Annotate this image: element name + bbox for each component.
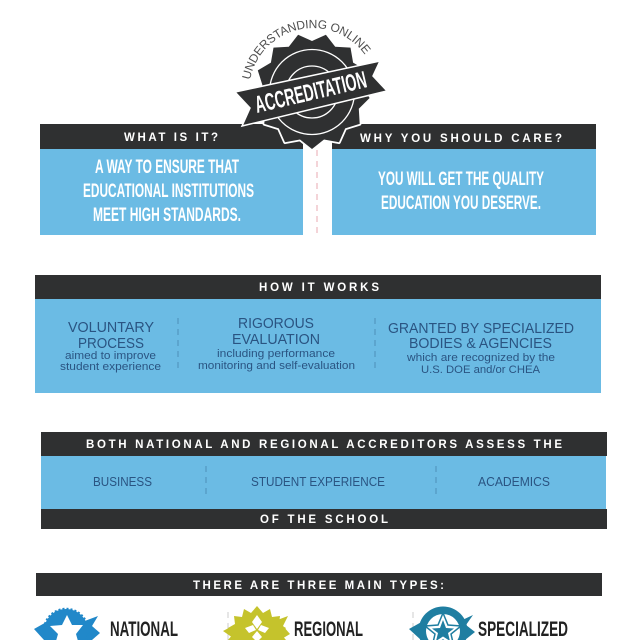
column: rigorous evaluation: EVALUATION xyxy=(232,332,320,348)
column: voluntary process: aimed to improve xyxy=(65,350,156,362)
text block: definition: EDUCATIONAL INSTITUTIONS xyxy=(83,180,254,202)
panel: what is it xyxy=(40,124,303,235)
panel: accreditors assess xyxy=(41,432,607,529)
ribbon text: ACCREDITATION xyxy=(252,67,369,119)
icon: gear seal xyxy=(254,35,370,149)
heading bar: three main types: THERE ARE THREE MAIN TYPES: xyxy=(193,580,444,592)
badge: understanding online accreditation xyxy=(236,20,386,149)
text block: definition: A WAY TO ENSURE THAT xyxy=(95,156,239,178)
column: voluntary process: VOLUNTARY xyxy=(68,320,154,336)
text block: reason xyxy=(378,168,544,214)
type: regional xyxy=(223,606,363,640)
type: national xyxy=(34,609,178,640)
heading: what is it: WHAT IS IT? xyxy=(124,132,218,144)
label: academics: ACADEMICS xyxy=(478,475,550,489)
heading bar: three main types xyxy=(36,573,602,596)
heading: why you should care: WHY YOU SHOULD CARE? xyxy=(360,133,562,145)
label: business: BUSINESS xyxy=(93,475,152,489)
column: voluntary process: PROCESS xyxy=(78,336,144,352)
icon: national badge xyxy=(34,609,100,640)
panel: how it works xyxy=(35,275,601,393)
column: rigorous evaluation xyxy=(198,316,355,372)
text block: definition: MEET HIGH STANDARDS. xyxy=(93,204,241,226)
column: voluntary process: student experience xyxy=(60,361,161,373)
footer: of the school: OF THE SCHOOL xyxy=(260,514,388,526)
column: granted by specialized bodies xyxy=(388,321,574,376)
column: granted by specialized bodies: which are recognized by the xyxy=(406,352,555,364)
column: voluntary process xyxy=(60,320,161,373)
text block: definition xyxy=(83,156,254,226)
column: rigorous evaluation: RIGOROUS xyxy=(238,316,314,332)
heading: both national and regional: BOTH NATIONAL AND REGIONAL ACCREDITORS ASSESS THE xyxy=(86,439,562,451)
column: granted by specialized bodies: GRANTED BY SPECIALIZED xyxy=(388,321,574,337)
text block: reason: EDUCATION YOU DESERVE. xyxy=(381,192,541,214)
column: granted by specialized bodies: BODIES & AGENCIES xyxy=(409,336,552,352)
ribbon xyxy=(235,61,387,126)
column: rigorous evaluation: including performance xyxy=(217,348,335,360)
heading: how it works: HOW IT WORKS xyxy=(259,282,379,294)
panel: why you should care xyxy=(332,124,596,235)
column: granted by specialized bodies: U.S. DOE and/or CHEA xyxy=(421,364,541,376)
icon: regional badge xyxy=(223,606,290,640)
icon: specialized badge xyxy=(409,606,475,640)
label: student experience: STUDENT EXPERIENCE xyxy=(251,475,385,489)
type: specialized xyxy=(409,606,568,640)
column: rigorous evaluation: monitoring and self-evaluation xyxy=(198,360,355,372)
arc text: UNDERSTANDING ONLINE xyxy=(242,20,371,78)
